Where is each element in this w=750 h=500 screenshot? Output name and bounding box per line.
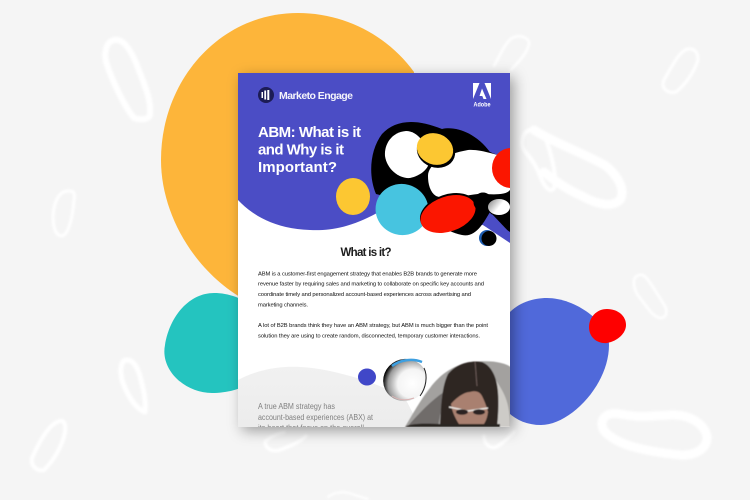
title: Important? [258,159,337,176]
title: ABM: What is it [258,124,361,141]
title: and Why is it [258,142,344,158]
teal blob [164,293,270,393]
body paragraphs: ABM is a customer-first engagement strategy that enables B2B brands to generate more [258,272,477,278]
body paragraphs [258,272,488,340]
gradient orb [383,358,427,402]
document card [238,73,530,432]
blue blob [490,298,609,425]
body paragraphs: marketing channels. [258,302,308,308]
body paragraphs: coordinate timely and personalized account-based experiences across advertising and [258,292,471,298]
hair [440,362,498,427]
yellow shape [416,133,456,168]
Adobe logo: Adobe [474,102,491,108]
sweater [405,361,512,427]
gray callout text: A true ABM strategy has [258,402,335,411]
heading: What is it? [340,247,392,259]
large white shape [428,150,510,198]
small gradient orb [488,198,510,216]
abstract blob cluster [371,122,510,246]
dark lower strip [405,424,500,427]
brand name: Marketo Engage [279,90,353,102]
hair part [475,362,477,386]
small black circle [474,192,489,208]
white circle [385,131,429,178]
red ellipse [420,193,476,233]
photo: woman with glasses [405,361,512,427]
gray callout text [258,403,373,427]
body paragraphs: revenue faster by requiring sales and marketing to collaborate on specific key accounts and [258,282,484,288]
title [258,124,361,176]
Adobe logo [473,83,491,108]
purple wedge [483,214,510,243]
red blob [589,309,626,343]
face [451,391,488,427]
dark dot [479,230,496,246]
gray callout text: its heart that focus on the overall [258,424,364,432]
Marketo Engage logo [258,87,274,103]
red shape right [492,148,510,188]
body paragraphs: solution they are using to create random, disconnected, temporary customer interactions. [258,334,480,340]
body paragraphs: A lot of B2B brands think they have an ABM strategy, but ABM is much bigger than the point [258,323,488,329]
yellow circle [336,178,370,215]
black mass [371,122,510,235]
orange blob [161,13,420,300]
glasses [449,407,488,415]
gray callout text: account-based experiences (ABX) at [258,413,374,422]
gray wave panel [238,367,420,427]
cyan blob [376,184,428,236]
indigo dot [358,368,376,386]
purple header [238,73,510,242]
